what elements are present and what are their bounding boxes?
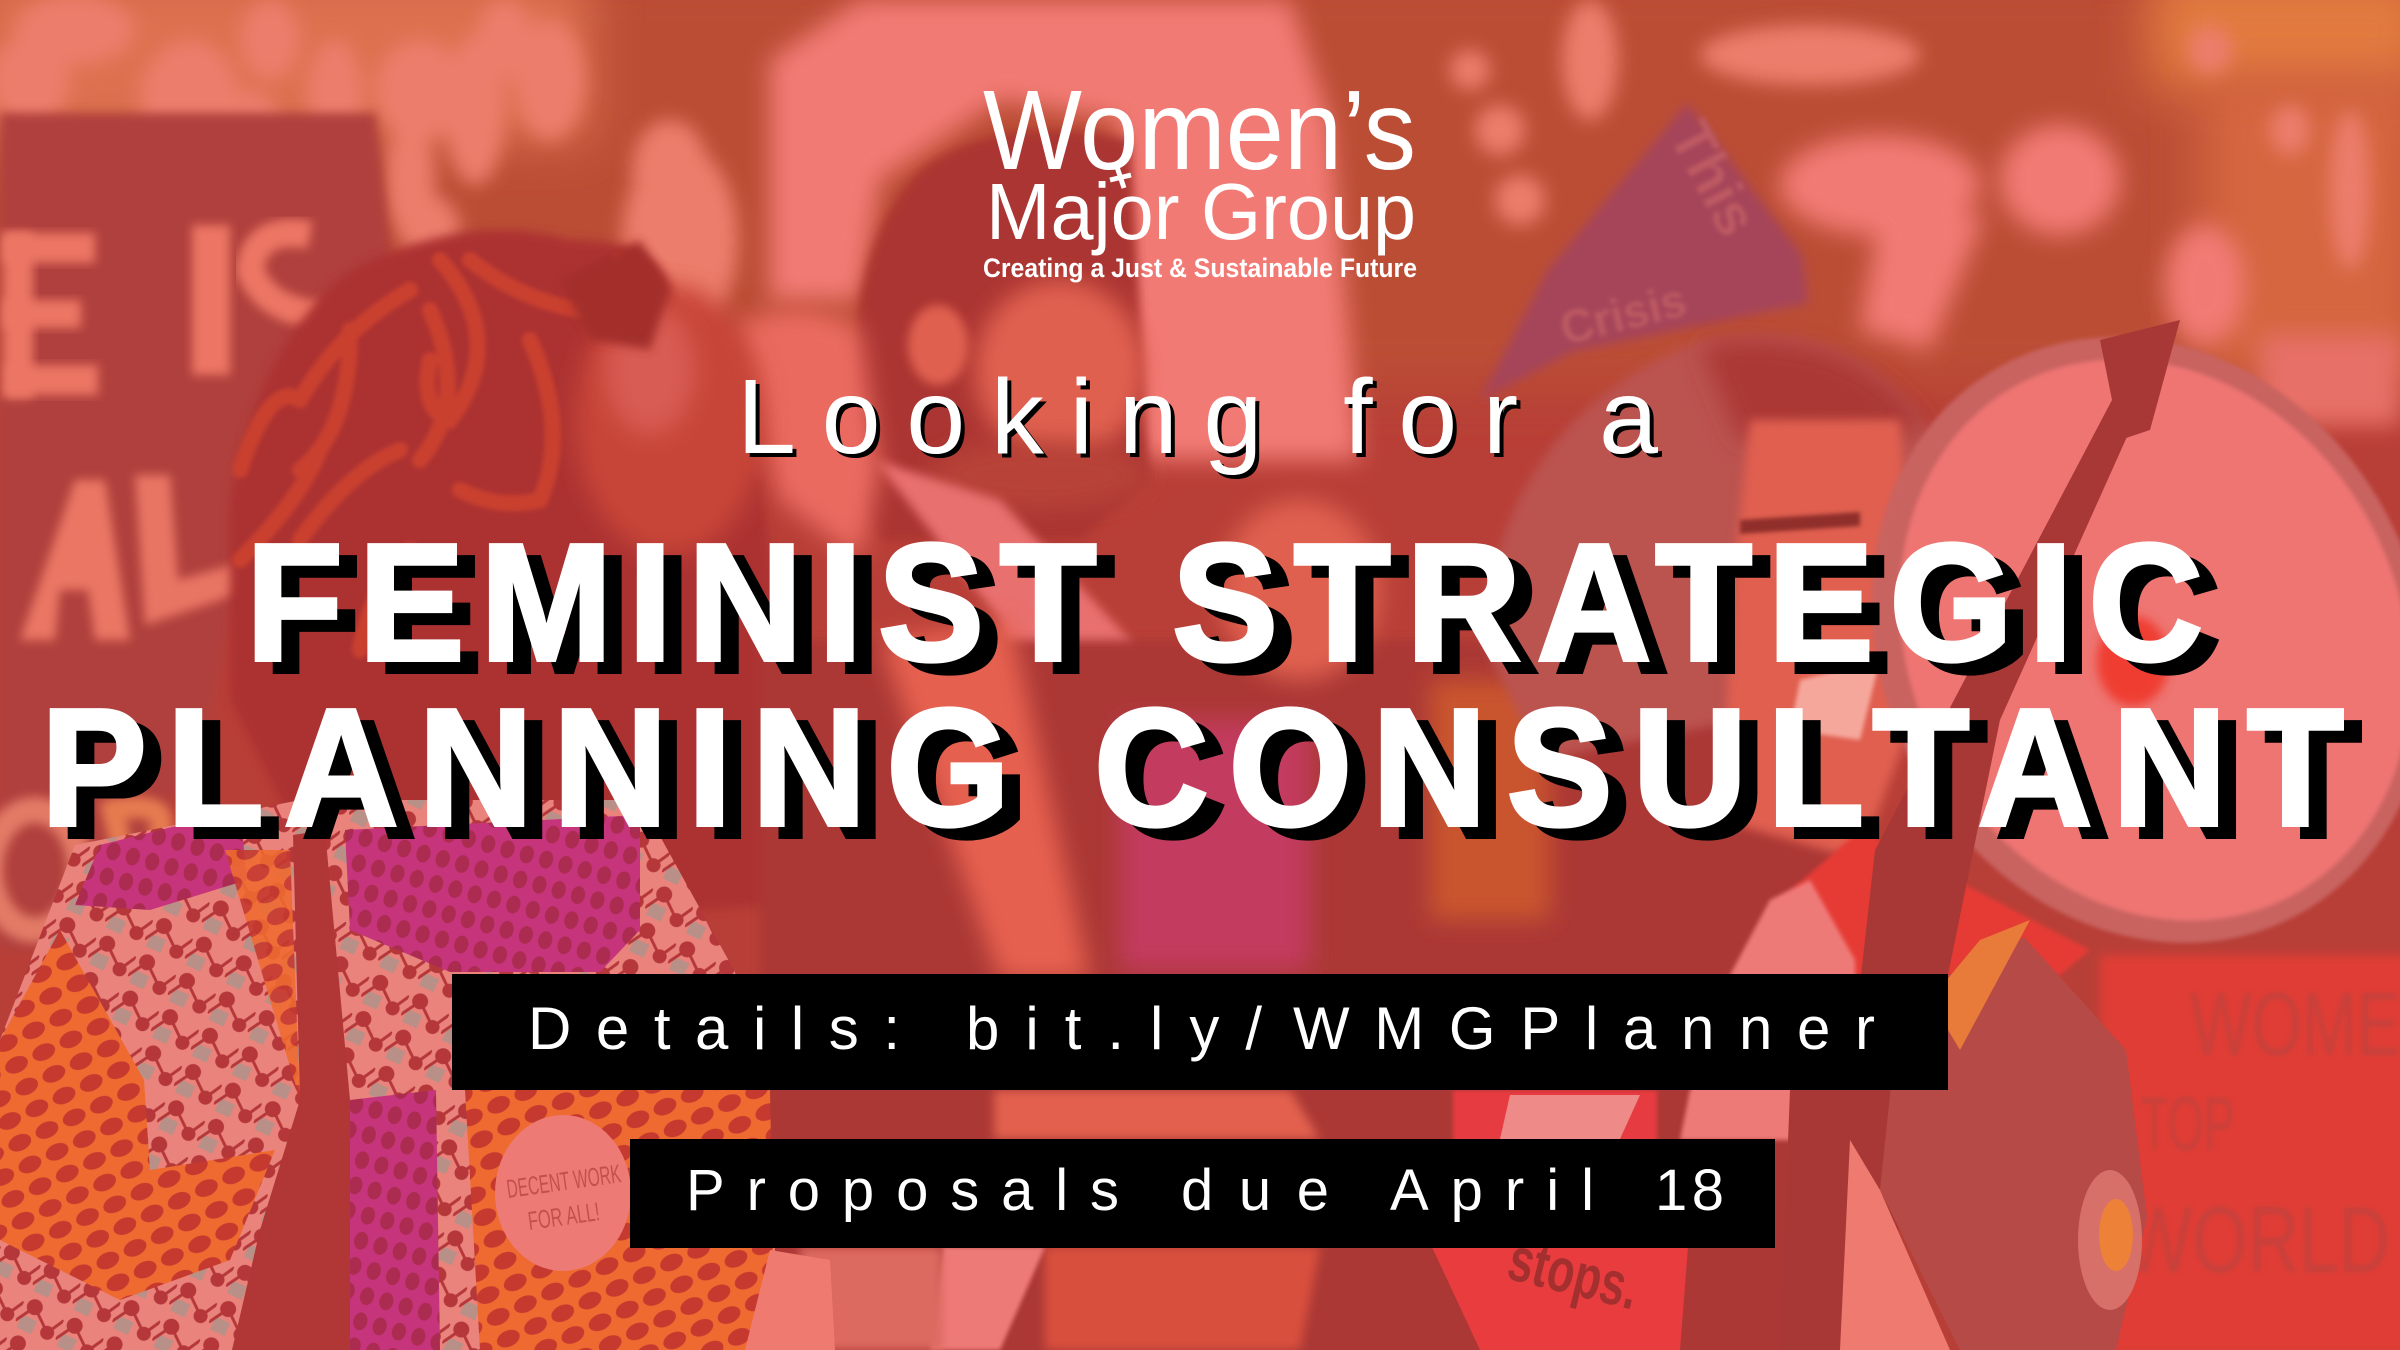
megaphone (1767, 239, 2400, 1041)
stops bag (1432, 1095, 1780, 1350)
details banner: Details: (528, 995, 900, 1062)
arm with sleeve and patch (1840, 920, 2147, 1350)
deadline banner (630, 1139, 1775, 1248)
badge: Decent Work For All: FOR ALL! (526, 1196, 601, 1236)
subtitle: Looking for a: Looking for a (741, 362, 1662, 480)
purple placard: This (1657, 111, 1770, 246)
central man (730, 130, 1150, 950)
badge: Decent Work For All (495, 1115, 631, 1271)
title line 1: FEMINIST STRATEGIC (264, 521, 2221, 708)
deadline banner: Proposals (686, 1158, 1119, 1223)
purple placard (1480, 103, 1808, 400)
deadline banner: due (1181, 1158, 1329, 1223)
details banner (452, 974, 1948, 1090)
title line 2: PLANNING CONSULTANT (41, 674, 2344, 861)
main woman with dreadlocks (230, 230, 830, 940)
details banner: bit.ly/ (966, 995, 1262, 1062)
badge: Decent Work For All: DECENT WORK (505, 1158, 623, 1204)
woman with glasses (1483, 334, 1930, 860)
logo wordmark: Women's Major Group: Creating a Just & Sustainable Future (983, 253, 1417, 283)
title line 2: PLANNING CONSULTANT (59, 686, 2362, 873)
logo wordmark: Women's Major Group: Major Group (986, 167, 1416, 256)
black sign with slogan at left (0, 113, 395, 950)
purple placard: Crisis (1555, 273, 1691, 355)
large pink poster blobs (770, 0, 2400, 460)
logo female symbol (1110, 167, 1131, 188)
deadline banner: 18 (1655, 1158, 1724, 1223)
red sign bottom right (2100, 955, 2400, 1350)
title: Feminist Strategic Planning Consultant (41, 509, 2362, 873)
patterned dress (0, 800, 835, 1350)
foliage background top (0, 0, 2400, 390)
title line 1: FEMINIST STRATEGIC (246, 509, 2203, 696)
logo wordmark: Women's Major Group (983, 67, 1417, 283)
logo wordmark: Women's Major Group: Women’s (983, 67, 1416, 193)
details banner: WMGPlanner (1293, 995, 1875, 1062)
red sign bottom right: TOP (2140, 1082, 2235, 1167)
bokeh lights (0, 0, 2370, 335)
lower centre crowd (760, 500, 1860, 1350)
deadline banner: April (1390, 1158, 1594, 1223)
megaphone strap (1780, 320, 2180, 1350)
subtitle: Looking for a: Looking for a (737, 358, 1658, 476)
red megaphone cone (1453, 830, 2090, 1145)
stops bag: stops. (1502, 1225, 1646, 1323)
